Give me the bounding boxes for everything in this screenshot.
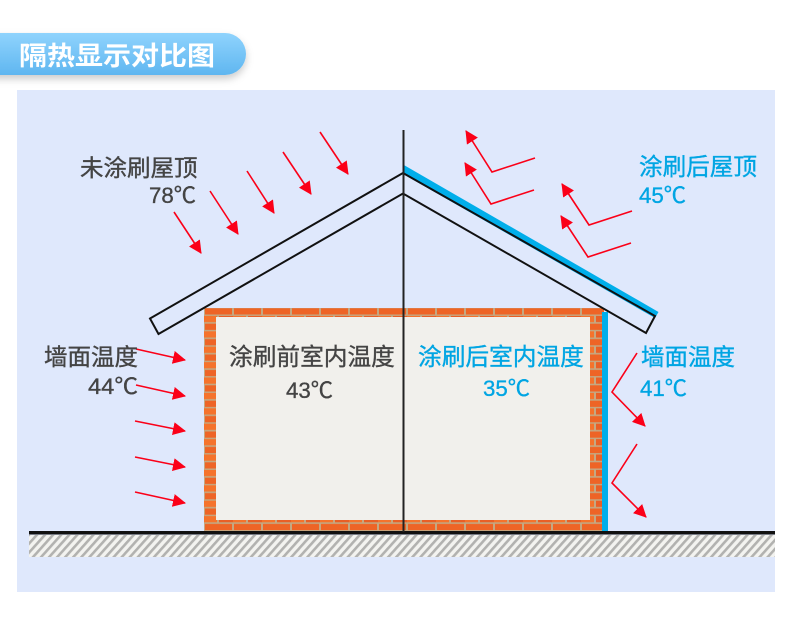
label: right wall (640, 344, 735, 401)
roof outline (150, 173, 655, 334)
panel: comparison background (17, 90, 775, 592)
label: indoor before (229, 344, 395, 403)
label: right wall: 墙面温度 (641, 344, 735, 370)
blue coating on wall (602, 312, 608, 531)
label: coated roof: 45℃ (639, 183, 686, 208)
label: indoor after: 涂刷后室内温度 (418, 344, 584, 371)
label: left wall (44, 344, 138, 399)
ground line (29, 531, 775, 534)
label: uncoated roof: 78℃ (149, 183, 196, 208)
label: right wall: 41℃ (640, 376, 687, 401)
heat arrows: reflected wall (612, 353, 646, 517)
label: indoor after: 35℃ (483, 376, 530, 401)
label: left wall: 44℃ (88, 374, 138, 399)
label: indoor before: 涂刷前室内温度 (229, 344, 395, 371)
wall interior (216, 317, 590, 520)
heat arrows: reflected roof (465, 131, 632, 257)
brick wall (204, 308, 604, 531)
label: uncoated roof: 未涂刷屋顶 (80, 155, 198, 181)
label: indoor after (418, 344, 584, 401)
label: left wall: 墙面温度 (44, 344, 138, 370)
label: uncoated roof (80, 155, 198, 208)
heat arrows: incoming roof (174, 132, 348, 253)
label: coated roof (639, 154, 757, 208)
label: indoor before: 43℃ (286, 378, 333, 403)
heat arrows: incoming wall (135, 349, 185, 503)
centre divider (402, 130, 404, 532)
blue coating on roof (403, 164, 658, 318)
label: coated roof: 涂刷后屋顶 (639, 154, 757, 181)
ground hatch (29, 535, 775, 557)
title banner: 隔热显示对比图 (19, 41, 215, 71)
title banner (0, 33, 246, 75)
